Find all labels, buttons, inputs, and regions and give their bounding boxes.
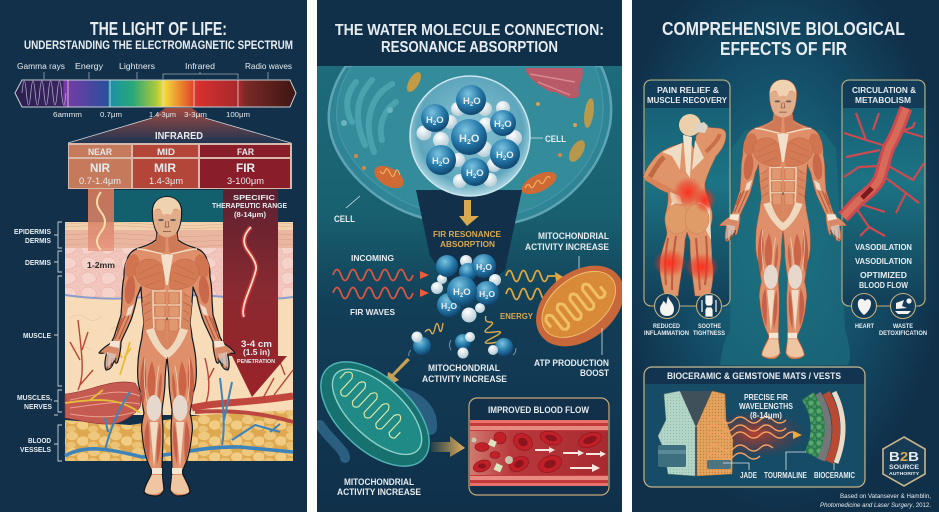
water droplet cluster: O: [473, 96, 481, 107]
ATP label: ATP PRODUCTION: [534, 358, 609, 368]
icon: detox: [890, 294, 916, 318]
B2B badge: SOURCE: [889, 464, 920, 471]
anatomy labels: EPIDERMIS: [14, 227, 51, 236]
excited water cluster: 2: [447, 307, 450, 313]
water droplet cluster: H: [494, 119, 501, 130]
cell labels: CELL: [545, 134, 566, 145]
B2B badge: AUTHORITY: [889, 471, 919, 476]
header band: RESONANCE ABSORPTION: [381, 39, 558, 56]
infrared table: [68, 143, 292, 189]
energy waves: [500, 270, 565, 321]
header band: THE WATER MOLECULE CONNECTION:: [335, 22, 604, 39]
back figure: [643, 114, 726, 296]
citation: Based on Vatansever & Hamblin,: [840, 493, 931, 500]
title: UNDERSTANDING THE ELECTROMAGNETIC SPECTRUM: [24, 40, 293, 52]
vibrating molecules: [409, 316, 516, 358]
wavelength scale: [53, 110, 250, 119]
water droplet cluster: O: [506, 150, 514, 161]
wavelength label: [739, 392, 793, 420]
improved blood flow box: [469, 398, 609, 495]
excited water cluster: O: [450, 301, 457, 311]
water droplet cluster: H: [496, 150, 503, 161]
anatomy labels: NERVES: [24, 402, 52, 411]
FIR penetration arrow: THERAPEUTIC RANGE: [212, 201, 287, 210]
excited water cluster: [431, 254, 501, 322]
panel: pain relief: MUSCLE RECOVERY: [647, 96, 728, 105]
wavelength scale: 1.4-3μm: [149, 110, 176, 119]
infrared table: FAR: [237, 147, 254, 157]
infrared table: NIR: [90, 163, 111, 175]
mitochondrial label bottom: ACTIVITY INCREASE: [337, 487, 421, 497]
vest: [658, 391, 733, 476]
anatomy labels: BLOOD: [28, 436, 52, 445]
B2B badge: [883, 437, 925, 486]
circulation captions: BLOOD FLOW: [859, 281, 908, 290]
mitochondrial label middle: [422, 364, 507, 382]
water droplet cluster: H: [466, 168, 473, 179]
wavelength scale: 0.7μm: [100, 110, 122, 119]
water droplet cluster: O: [471, 133, 480, 145]
spectrum labels: Infrared: [185, 61, 215, 71]
icon captions: HEART: [855, 323, 875, 330]
cell membrane: [329, 66, 611, 224]
icon captions: TIGHTNESS: [693, 330, 725, 337]
FIR penetration arrow: SPECIFIC: [233, 193, 276, 202]
title: COMPREHENSIVE BIOLOGICAL: [662, 19, 905, 39]
excited water cluster: H: [441, 301, 447, 311]
human figure: [720, 80, 846, 359]
citation: [820, 493, 931, 509]
NIR penetration beam: [87, 189, 115, 270]
orange mitochondrion: [536, 266, 622, 346]
icon: knee joint: [696, 294, 722, 318]
icon captions: INFLAMMATION: [644, 330, 689, 337]
mitochondrial label middle: ACTIVITY INCREASE: [422, 374, 507, 384]
panel: mats and vests: [644, 367, 865, 487]
FIR waves from vest: [708, 417, 799, 459]
icon: flame: [654, 294, 680, 318]
ATP label: [534, 328, 610, 378]
vessels and nerves: [65, 320, 293, 457]
icon captions: [855, 323, 927, 337]
cell labels: [334, 134, 566, 225]
icon captions: SOOTHE: [698, 323, 721, 330]
mitochondrial label top: MITOCHONDRIAL: [538, 231, 610, 241]
teal mitochondrion: [317, 361, 438, 467]
FIR penetration arrow: PENETRATION: [237, 359, 275, 365]
excited water cluster: O: [463, 287, 471, 298]
infrared table: NEAR: [88, 147, 112, 157]
water droplet cluster: H: [426, 115, 433, 126]
spectrum labels: Gamma rays: [17, 61, 65, 71]
down arrow: [459, 200, 479, 226]
excited water cluster: 2: [485, 295, 488, 301]
icon captions: REDUCED: [653, 323, 680, 330]
excited water cluster: O: [488, 289, 495, 299]
spectrum labels: Radio waves: [245, 61, 292, 71]
energy waves: ENERGY: [500, 311, 533, 321]
infrared fan: INFRARED: [155, 130, 203, 142]
FIR penetration arrow: 3-4 cm: [241, 339, 272, 349]
spectrum bar: [15, 80, 296, 107]
absorption label: FIR RESONANCE: [433, 229, 501, 239]
water droplet cluster: O: [504, 119, 512, 130]
infrared table: 3-100μm: [227, 176, 264, 186]
water droplet cluster: H: [459, 133, 467, 145]
material labels: JADE: [740, 471, 758, 480]
icon: heart: [852, 294, 876, 318]
absorption label: [434, 231, 501, 247]
water droplet cluster: 2: [433, 121, 437, 127]
spectrum labels: Energy: [75, 61, 104, 71]
arrow head: [793, 431, 802, 439]
pain hotspots: [653, 177, 719, 281]
material layers: [808, 392, 843, 463]
panel: biological effects: [632, 0, 939, 512]
water droplet cluster: 2: [501, 125, 505, 131]
circulation captions: OPTIMIZED: [860, 271, 907, 280]
material labels: TOURMALINE: [764, 471, 808, 480]
anatomy labels: MUSCLE: [23, 331, 51, 340]
water droplet cluster: O: [436, 115, 444, 126]
mitochondrial label bottom: MITOCHONDRIAL: [344, 477, 415, 487]
arrow to blood flow: [431, 436, 465, 457]
water droplet cluster: 2: [473, 174, 477, 180]
incoming FIR waves: INCOMING: [351, 253, 394, 263]
title: [662, 19, 905, 59]
title: [24, 19, 293, 52]
excited water cluster: H: [476, 262, 482, 272]
excited water cluster: O: [485, 262, 492, 272]
title: THE LIGHT OF LIFE:: [90, 19, 227, 39]
circulation captions: VASODILATION: [855, 243, 912, 252]
water droplet cluster: O: [442, 156, 450, 167]
panel: pain relief: [643, 80, 730, 337]
excited water cluster: 2: [482, 268, 485, 274]
panel: pain relief: PAIN RELIEF &: [657, 86, 719, 95]
mitochondrial label top: [525, 232, 609, 269]
panel: mats and vests: BIOCERAMIC & GEMSTONE MATS / VESTS: [667, 371, 841, 381]
teal light pool: [720, 130, 850, 365]
title: EFFECTS OF FIR: [720, 39, 847, 59]
water droplet cluster: H: [463, 96, 470, 107]
panel: water molecule connection: [302, 0, 640, 512]
FIR penetration arrow: (1.5 in): [243, 348, 270, 357]
water droplet cluster: 2: [470, 102, 474, 108]
infrared table: 1.4-3μm: [149, 176, 183, 186]
mitochondrial label bottom: [337, 478, 421, 495]
panel: electromagnetic spectrum: [0, 0, 307, 512]
material labels: BIOCERAMIC: [814, 471, 855, 480]
wavelength scale: 6ammm: [53, 110, 82, 119]
icon captions: [644, 323, 725, 337]
excited water cluster: H: [453, 287, 460, 298]
absorption cone: [416, 190, 522, 290]
human figure: [99, 197, 235, 496]
cell labels: CELL: [334, 214, 355, 225]
anatomy labels: DERMIS: [25, 236, 51, 245]
panel: circulation: METABOLISM: [855, 96, 911, 105]
wavelength label: (8-14μm): [750, 410, 782, 420]
wavelength scale: 3-3μm: [184, 110, 207, 119]
infrared table: FIR: [236, 163, 256, 175]
wavelength label: PRECISE FIR: [744, 392, 788, 402]
panel: circulation: [842, 80, 927, 337]
FIR penetration arrow: (8-14μm): [234, 210, 266, 219]
circulation captions: [855, 243, 912, 290]
wavelength scale: 100μm: [226, 110, 250, 119]
anatomy labels: VESSELS: [20, 445, 51, 454]
wavelength label: WAVELENGTHS: [739, 401, 793, 411]
material labels: [723, 452, 855, 480]
citation: Photomedicine and Laser Surgery, 2012.: [820, 502, 931, 509]
B2B badge: B2B: [889, 449, 919, 464]
mitochondrial label middle: MITOCHONDRIAL: [428, 363, 501, 373]
heat glow: [703, 410, 807, 458]
spectrum labels: Lightners: [119, 61, 155, 71]
icon captions: DETOXIFICATION: [879, 330, 927, 337]
water droplet cluster: 2: [503, 156, 507, 162]
NIR penetration beam: 1-2mm: [87, 260, 115, 270]
infrared table: 0.7-1.4μm: [79, 176, 121, 186]
incoming FIR waves: FIR WAVES: [350, 307, 395, 317]
FIR penetration arrow: [212, 189, 287, 397]
blood vessel tree: [843, 108, 924, 236]
water droplet cluster: 2: [439, 162, 443, 168]
infrared table: MIR: [154, 163, 177, 175]
absorption label: ABSORPTION: [440, 239, 495, 249]
excited water cluster: H: [479, 289, 485, 299]
excited water cluster: 2: [460, 293, 464, 299]
water droplet cluster: H: [432, 156, 439, 167]
icon captions: WASTE: [893, 323, 913, 330]
improved blood flow box: IMPROVED BLOOD FLOW: [488, 405, 589, 415]
water droplet cluster: [410, 76, 530, 196]
infrared table: MID: [157, 147, 176, 157]
skin cross-section: [65, 190, 293, 461]
mitochondrial label top: ACTIVITY INCREASE: [525, 242, 609, 252]
anatomy labels: MUSCLES,: [17, 393, 52, 402]
anatomy labels: [14, 222, 62, 461]
circulation captions: VASODILATION: [855, 257, 912, 266]
anatomy labels: DERMIS: [25, 258, 51, 267]
panel: circulation: CIRCULATION &: [852, 86, 916, 95]
water droplet cluster: O: [476, 168, 484, 179]
infrared fan: [68, 108, 291, 143]
incoming FIR waves: [333, 253, 429, 317]
arrow to mitochondrion: [387, 358, 410, 382]
ATP label: BOOST: [580, 368, 610, 378]
header band: [317, 0, 622, 66]
spectrum labels: [17, 61, 292, 79]
water droplet cluster: 2: [467, 139, 471, 146]
